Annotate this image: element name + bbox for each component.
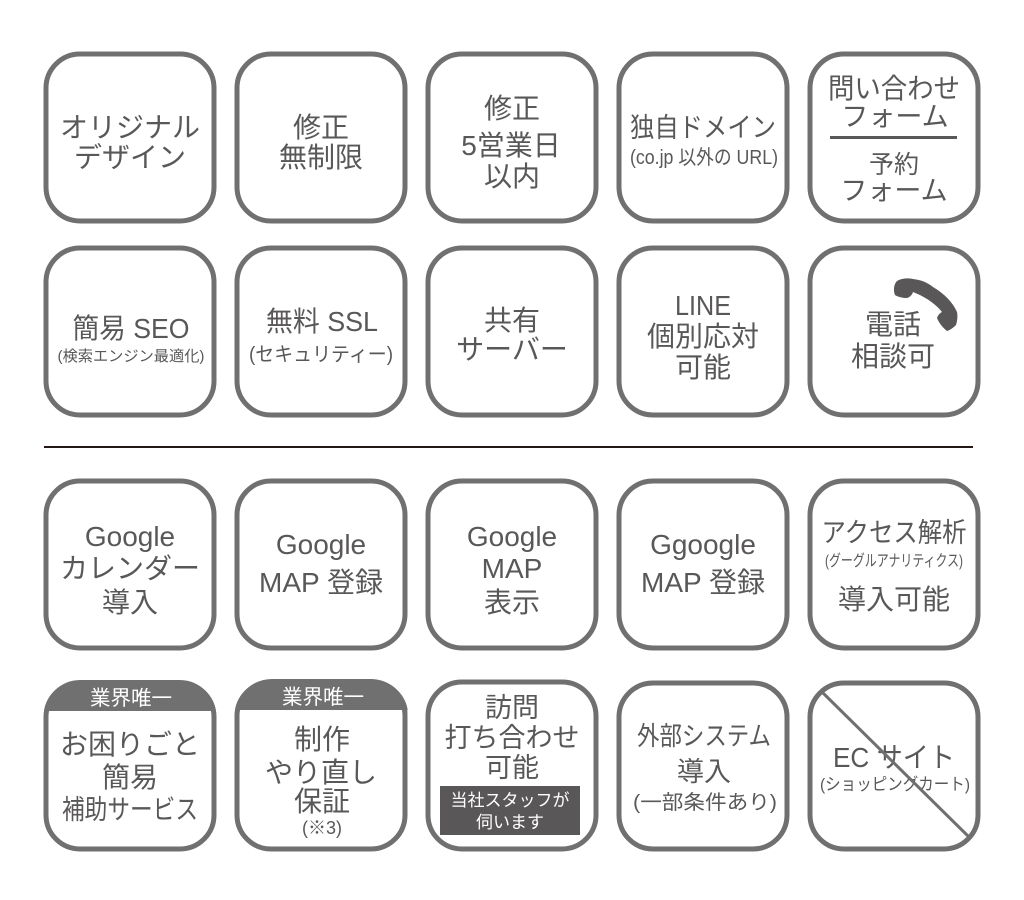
card: unlimited revisions	[237, 54, 405, 221]
card: redo guarantee: やり直し	[265, 757, 377, 788]
card: original design: デザイン	[74, 142, 186, 173]
card: original design: オリジナル	[60, 112, 200, 143]
card: on-site meeting	[428, 682, 596, 849]
card: revisions within 5 business days	[428, 54, 596, 221]
card: Google MAP display	[428, 481, 596, 648]
card: external system: 導入	[677, 757, 731, 787]
card: Ggoogle MAP registration: MAP 登録	[641, 567, 765, 598]
card: Ggoogle MAP registration	[619, 481, 787, 648]
card: on-site meeting: 打ち合わせ	[444, 723, 580, 753]
card: access analysis: 導入可能	[838, 584, 950, 615]
card: redo guarantee: 制作	[294, 724, 350, 755]
card: redo guarantee: (※3)	[302, 818, 342, 838]
card: revisions within 5 business days: 修正	[484, 93, 540, 124]
card: Ggoogle MAP registration: Ggoogle	[650, 529, 756, 560]
card: external system	[619, 683, 787, 849]
card: LINE individual support	[619, 248, 787, 415]
card: Google Calendar: 導入	[102, 587, 158, 618]
callout: staff visit: 伺います	[476, 813, 544, 832]
card: simple SEO: (検索エンジン最適化)	[58, 348, 204, 365]
card: shared server: サーバー	[456, 334, 568, 365]
card: Google MAP display: 表示	[484, 587, 540, 618]
banner: industry first	[235, 679, 408, 714]
card: Google MAP registration: MAP 登録	[259, 567, 383, 598]
card: Google MAP display: MAP	[482, 553, 542, 584]
card: access analysis: アクセス解析	[822, 518, 966, 548]
card: Google Calendar: Google	[85, 521, 175, 552]
card: Google MAP display: Google	[467, 521, 557, 552]
card: trouble support service: 簡易	[102, 762, 158, 793]
callout: staff visit: 当社スタッフが	[450, 791, 570, 810]
card: LINE individual support: 個別応対	[647, 321, 759, 352]
card: inquiry and reservation forms	[810, 54, 978, 221]
card: access analysis	[810, 481, 978, 648]
card: phone consultation: 相談可	[851, 341, 935, 372]
card: trouble support service	[44, 680, 216, 849]
card: trouble support service: お困りごと	[60, 729, 200, 760]
card: Google Calendar: カレンダー	[60, 553, 200, 584]
card: external system: (一部条件あり)	[633, 791, 777, 814]
card: EC site not available	[810, 683, 978, 849]
card: original design	[46, 54, 214, 221]
card: trouble support service: 補助サービス	[62, 795, 198, 825]
card: on-site meeting: 訪問	[485, 693, 539, 723]
card: phone consultation: 電話	[865, 309, 921, 340]
card: shared server	[428, 248, 596, 415]
card: Google Calendar	[46, 481, 214, 648]
card: inquiry and reservation forms: 予約	[869, 151, 919, 179]
card: access analysis: (グーグルアナリティクス)	[825, 552, 963, 570]
card: free SSL: 無料 SSL	[266, 306, 378, 337]
card: unlimited revisions: 修正	[293, 112, 349, 143]
banner: industry first: 業界唯一	[90, 687, 172, 710]
card: original domain	[619, 54, 787, 221]
card: revisions within 5 business days: 以内	[484, 161, 540, 192]
icon: telephone handset	[894, 278, 957, 331]
card: LINE individual support: 可能	[675, 352, 731, 383]
card: revisions within 5 business days: 5営業日	[461, 130, 561, 161]
card: original domain: (co.jp 以外の URL)	[630, 146, 778, 169]
card: EC site not available: (ショッピングカート)	[820, 775, 970, 794]
card: redo guarantee	[235, 679, 408, 849]
card: shared server: 共有	[484, 305, 540, 336]
card: simple SEO: 簡易 SEO	[72, 313, 190, 344]
divider line	[44, 446, 973, 448]
card: free SSL	[237, 248, 405, 415]
card: external system: 外部システム	[637, 721, 771, 751]
banner: industry first	[44, 680, 216, 714]
card: redo guarantee: 保証	[294, 786, 350, 817]
card: inquiry and reservation forms: 問い合わせ	[828, 73, 960, 104]
card: Google MAP registration: Google	[276, 529, 366, 560]
card: Google MAP registration	[237, 481, 405, 648]
card: on-site meeting: 可能	[485, 753, 539, 783]
card: inquiry and reservation forms: フォーム	[840, 176, 948, 206]
card: free SSL: (セキュリティー)	[249, 344, 393, 366]
banner: industry first: 業界唯一	[282, 686, 364, 709]
callout: staff visit	[440, 786, 580, 835]
card: inquiry and reservation forms: フォーム	[841, 102, 949, 132]
card: simple SEO	[46, 248, 214, 415]
card: original domain: 独自ドメイン	[630, 113, 776, 143]
card: phone consultation	[810, 248, 978, 415]
card: EC site not available: EC サイト	[833, 742, 955, 773]
card: LINE individual support: LINE	[675, 290, 731, 321]
card: unlimited revisions: 無制限	[279, 142, 363, 173]
